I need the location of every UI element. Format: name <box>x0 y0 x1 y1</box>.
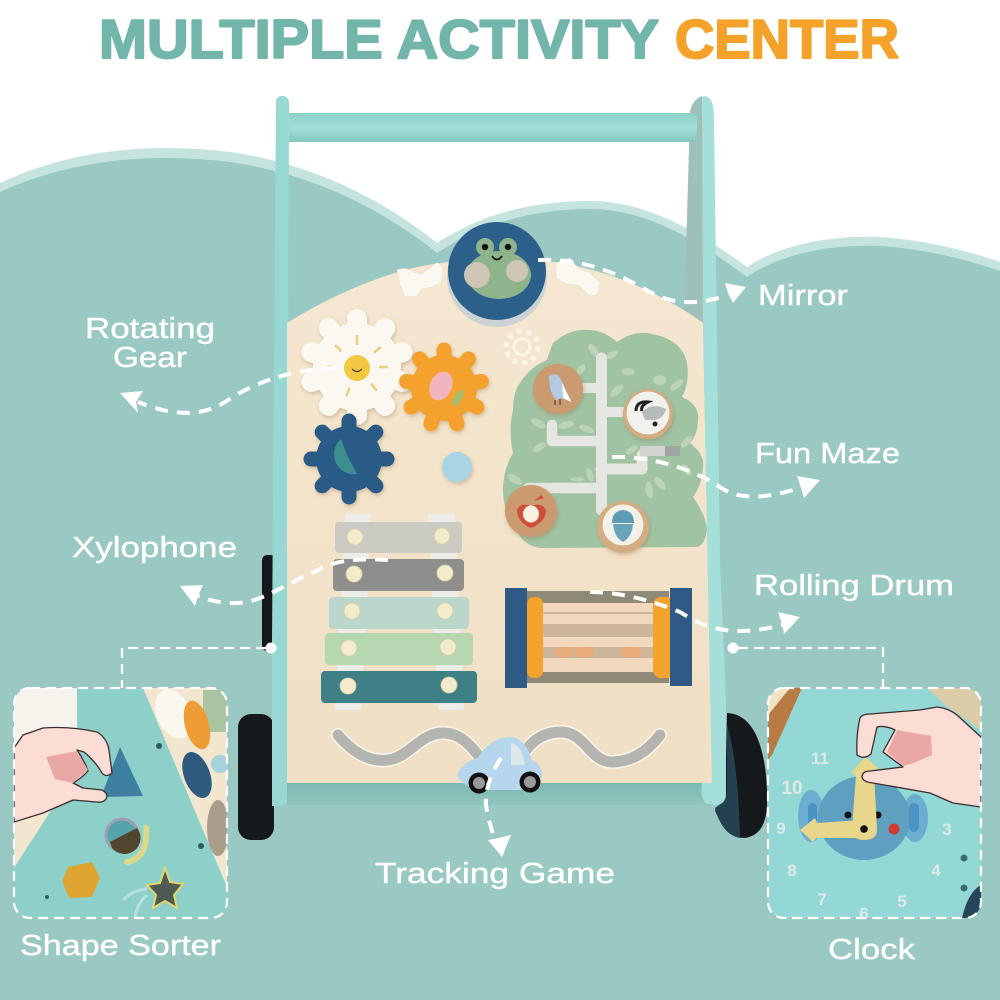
label: rotating gear: Gear <box>113 342 187 374</box>
clock numbers: 10 <box>781 778 803 799</box>
clock numbers: 5 <box>897 892 907 911</box>
tracking wave slot <box>338 732 660 762</box>
triangle piece <box>101 747 143 797</box>
drum end discs <box>527 597 543 678</box>
frog face <box>464 238 531 299</box>
dashed leader: tracking game <box>486 758 511 857</box>
tree leaves <box>506 342 694 499</box>
label: rolling drum: Rolling Drum <box>754 570 954 602</box>
label: fun maze: Fun Maze <box>755 438 900 470</box>
white sun gear <box>311 319 403 415</box>
label: xylophone: Xylophone <box>72 532 237 564</box>
label: shape sorter: Shape Sorter <box>20 930 221 962</box>
front right wheel <box>715 713 767 838</box>
elephant face <box>798 776 928 860</box>
xylophone <box>321 514 477 710</box>
wooden activity board <box>287 262 712 783</box>
dashed leader: mirror <box>538 260 746 303</box>
tree foliage <box>503 330 707 548</box>
clock numbers: 8 <box>787 861 797 880</box>
drum rods <box>543 603 653 672</box>
label: rotating gear: Rotating <box>85 313 215 345</box>
small screws <box>45 743 204 899</box>
acorn disc <box>597 501 649 553</box>
label: clock: Clock <box>828 934 916 966</box>
sun decal <box>506 331 538 363</box>
right frame post face <box>701 96 726 805</box>
title <box>99 8 899 70</box>
shape holes <box>106 819 138 851</box>
fun maze tree <box>503 330 707 553</box>
bird disc <box>533 364 583 414</box>
drum beads <box>554 646 642 658</box>
squirrel disc <box>623 389 673 439</box>
dashed leader: fun maze <box>612 457 820 498</box>
miniature gears <box>155 690 227 856</box>
navy umbrella gear <box>311 421 387 497</box>
clock numbers: 9 <box>776 819 786 838</box>
clock numbers: 11 <box>811 749 829 768</box>
clock numbers <box>776 749 952 923</box>
back left wheel <box>262 555 276 651</box>
front left wheel <box>238 714 274 840</box>
clock numbers: 4 <box>931 861 941 880</box>
label: tracking game: Tracking Game <box>375 858 615 890</box>
drum navy supports <box>505 588 527 688</box>
blue car <box>457 737 542 794</box>
orange flower gear <box>407 350 481 424</box>
apple disc <box>505 485 557 537</box>
frog mirror <box>397 222 600 327</box>
maze slots <box>528 358 680 510</box>
clock numbers: 3 <box>942 820 952 839</box>
clock numbers: 7 <box>817 890 827 909</box>
clock numbers: 6 <box>859 904 869 923</box>
inset: shape sorter <box>14 683 229 918</box>
xylophone bars <box>335 522 462 553</box>
walker frame and handle <box>272 96 706 806</box>
xylophone clips <box>335 514 464 710</box>
connector: clock <box>728 642 883 688</box>
dashed leader: xylophone <box>180 559 388 606</box>
rolling drum <box>505 588 692 688</box>
title: MULTIPLE ACTIVITY <box>99 8 659 70</box>
xylophone pegs <box>340 528 457 694</box>
dashed leader: rolling drum <box>590 592 800 634</box>
inset: clock <box>768 688 981 923</box>
label: mirror: Mirror <box>758 280 848 312</box>
illustrated hand <box>857 707 981 807</box>
blue ball <box>442 452 472 482</box>
clock hands <box>800 757 878 842</box>
illustrated hand <box>14 728 112 822</box>
title: CENTER <box>675 8 899 70</box>
connector: shape sorter <box>122 642 276 688</box>
label: rotating gear <box>85 313 215 374</box>
dashed leader: rotating gear <box>120 368 335 413</box>
mirror bow hinges <box>397 258 600 297</box>
under-board shadow <box>287 783 712 805</box>
